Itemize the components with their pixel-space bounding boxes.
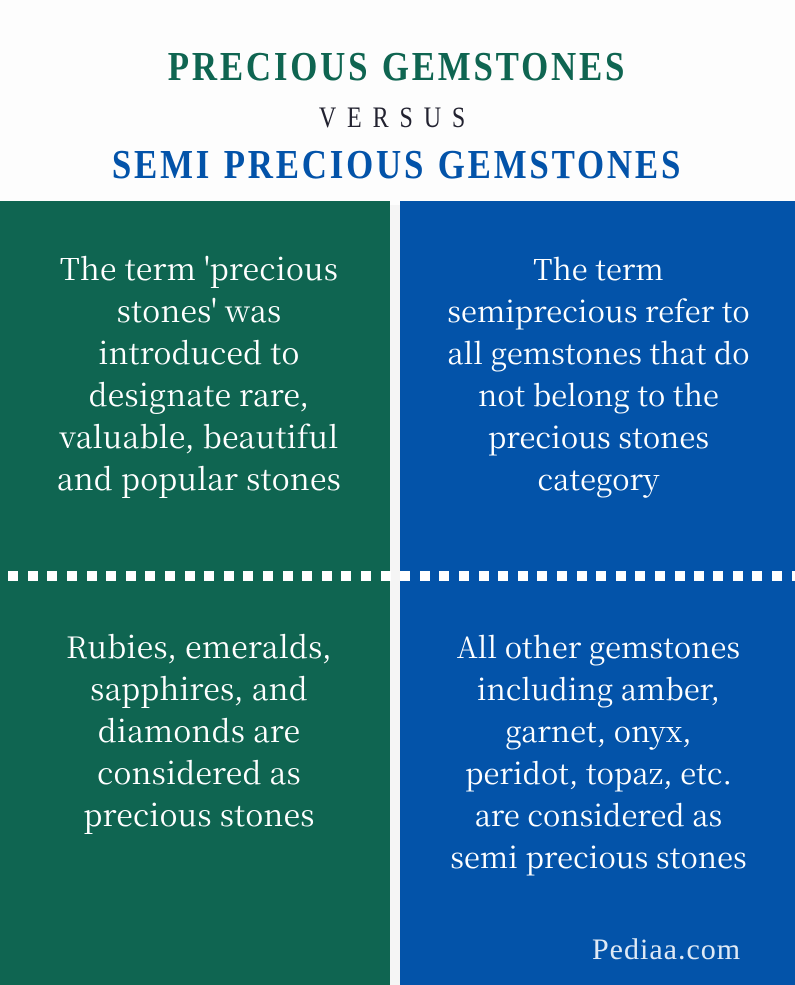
title: semi precious gemstones: SEMI PRECIOUS GEMSTONES	[112, 141, 683, 187]
text: precious examples: Rubies, emeralds,	[66, 623, 332, 667]
text: semi precious definition: The term	[533, 248, 664, 289]
text: precious definition: and popular stones	[57, 455, 341, 499]
text: precious definition: The term 'precious	[60, 245, 338, 289]
text: semi precious definition: all gemstones that do	[447, 332, 750, 373]
panel: precious gemstones column	[0, 201, 390, 985]
gutter between columns	[390, 205, 400, 985]
text: semi precious definition: semiprecious refer to	[447, 290, 750, 331]
text: precious definition: designate rare,	[89, 371, 309, 415]
text: precious definition: valuable, beautiful	[59, 413, 338, 457]
text: semi precious examples: All other gemstones	[457, 626, 740, 667]
title: precious gemstones: PRECIOUS GEMSTONES	[168, 43, 627, 89]
text: semi precious examples: including amber,	[477, 668, 720, 709]
text: precious definition	[57, 245, 341, 499]
text: precious examples: considered as	[97, 749, 301, 793]
text: semi precious examples	[450, 626, 747, 877]
text: precious examples: sapphires, and	[90, 665, 308, 709]
text: semi precious examples: semi precious stones	[450, 836, 747, 877]
text: semi precious examples: are considered as	[475, 794, 722, 835]
text: semi precious definition: not belong to the	[478, 374, 719, 415]
text: semi precious examples: peridot, topaz, etc.	[465, 752, 732, 793]
text: precious definition: introduced to	[98, 329, 300, 373]
text: precious definition: stones' was	[117, 287, 281, 331]
text: precious examples	[66, 623, 332, 835]
text: precious examples: precious stones	[83, 791, 315, 835]
text: semi precious definition: precious stones	[488, 416, 709, 457]
text: semi precious examples: garnet, onyx,	[505, 710, 692, 751]
text: precious examples: diamonds are	[98, 707, 300, 751]
text: semi precious definition: category	[537, 458, 660, 499]
logo: Pediaa.com: Pediaa.com	[592, 933, 741, 966]
text: semi precious definition	[447, 248, 750, 499]
panel: semi precious gemstones column	[400, 201, 795, 985]
subtitle: versus: VERSUS	[319, 101, 476, 134]
